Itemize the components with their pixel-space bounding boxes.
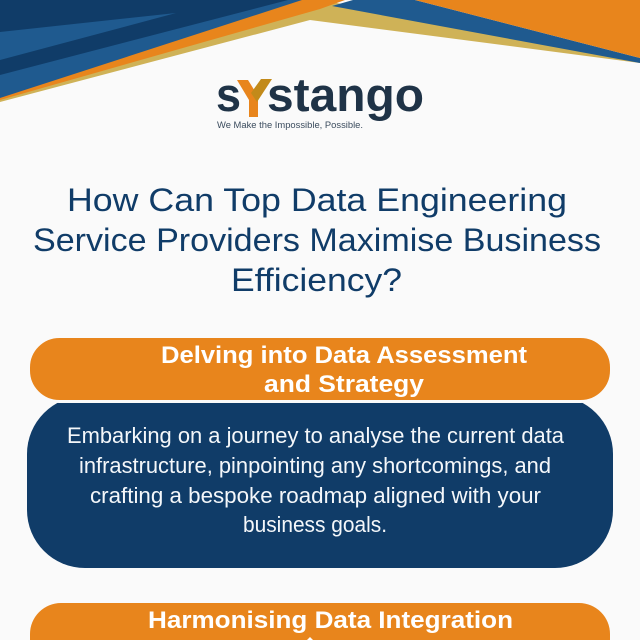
panel body (27, 396, 613, 568)
second heading pill (30, 603, 610, 640)
logo wordmark first letter: s (216, 68, 241, 121)
panel body text: business goals. (243, 512, 387, 537)
panel heading text: and Strategy (264, 371, 425, 398)
title (33, 182, 601, 298)
logo: Systango (216, 68, 424, 131)
panel body text (67, 423, 565, 537)
panel heading text (161, 342, 527, 398)
panel body text: Embarking on a journey to analyse the current data (67, 423, 565, 448)
panel body text: infrastructure, pinpointing any shortcomings, and (79, 453, 551, 478)
panel: harmonising data integration (30, 603, 610, 640)
second heading text: Harmonising Data Integration (148, 607, 513, 634)
panel body text: crafting a bespoke roadmap aligned with your (90, 483, 541, 508)
panel heading pill (28, 336, 612, 402)
title: Efficiency? (231, 262, 402, 298)
logo tagline: We Make the Impossible, Possible. (217, 120, 363, 131)
logo wordmark remainder: stango (267, 68, 424, 121)
panel heading text: Delving into Data Assessment (161, 342, 527, 369)
panel: data assessment and strategy (27, 336, 613, 568)
header banner: angular colour bands (0, 0, 640, 102)
title: Service Providers Maximise Business (33, 222, 601, 258)
clipped top of the heading's second line (307, 637, 313, 640)
logo Y mark (237, 79, 272, 117)
title: How Can Top Data Engineering (67, 182, 567, 218)
